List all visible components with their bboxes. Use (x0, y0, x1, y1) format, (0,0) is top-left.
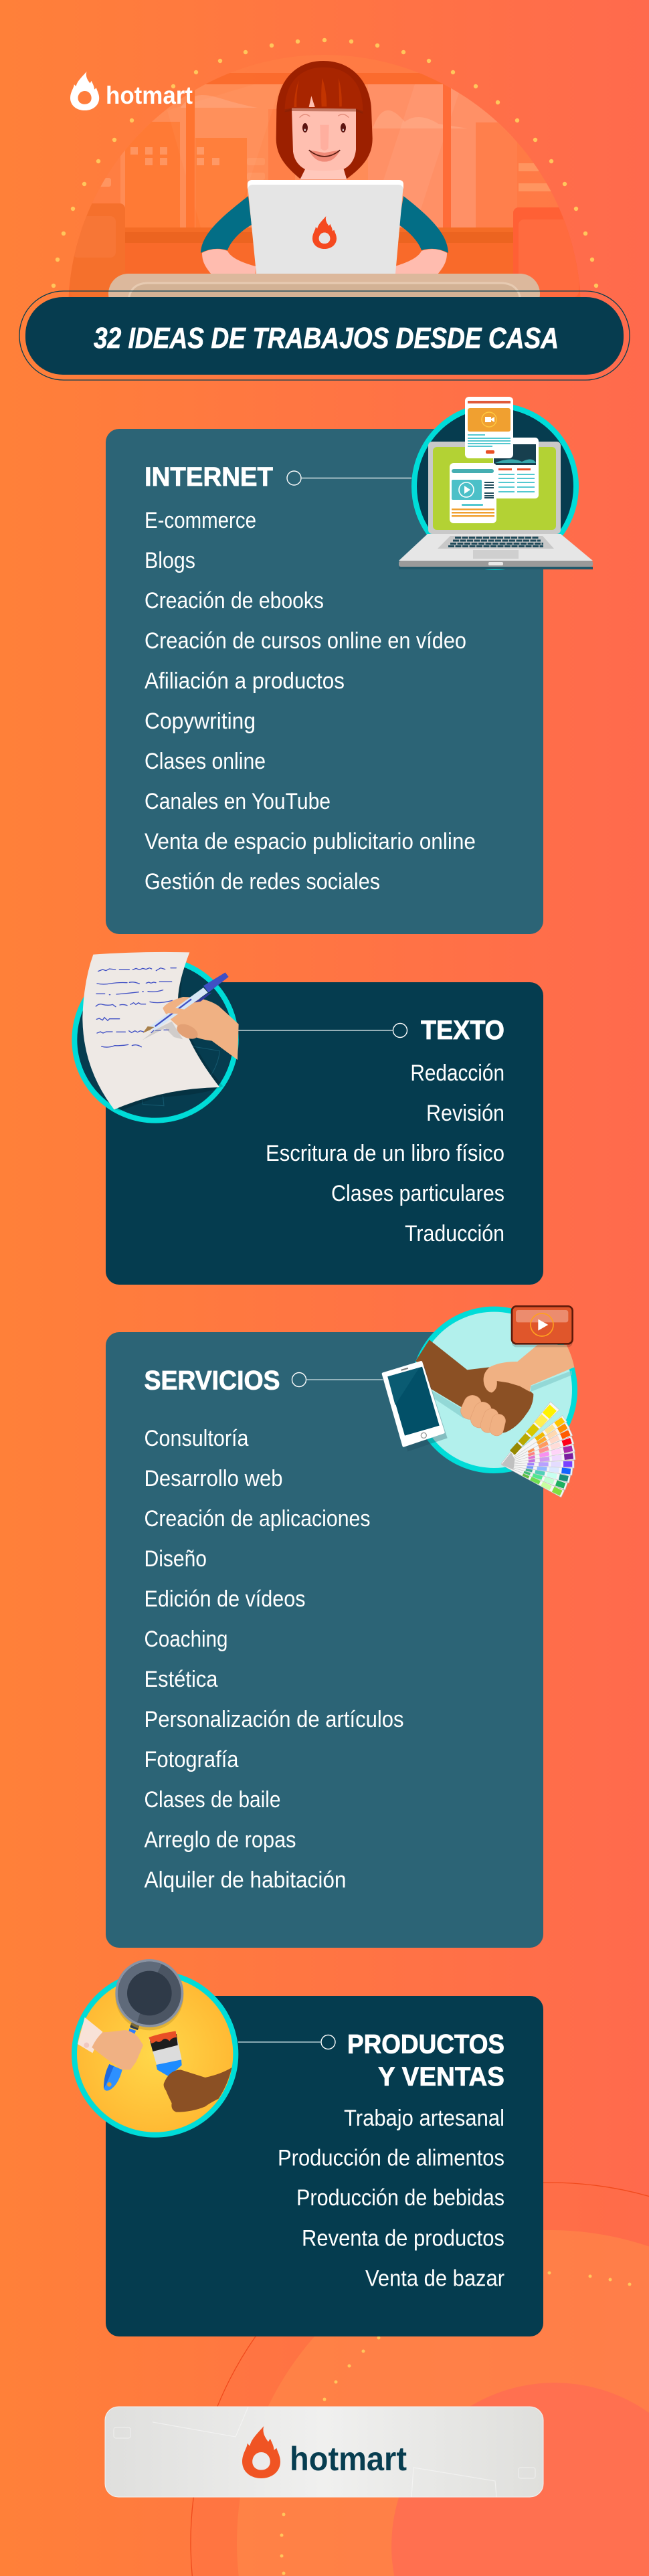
heading: texto: TEXTO (421, 1016, 504, 1045)
left hand and sleeve (78, 2017, 143, 2069)
list: internet: Creación de ebooks (145, 588, 324, 614)
bottom background domes (191, 2183, 649, 2576)
panel: internet (106, 429, 543, 934)
list: internet: E-commerce (145, 508, 256, 533)
list: texto: Redacción (410, 1061, 504, 1086)
illustration: laptop with web pages (399, 397, 593, 569)
title banner: 32 IDEAS DE TRABAJOS DESDE CASA (94, 322, 559, 355)
hotmart logo top: hotmart (106, 82, 193, 109)
heading: productos y ventas: Y VENTAS (378, 2062, 504, 2092)
connector: servicios (292, 1373, 383, 1386)
list: texto (266, 1061, 504, 1247)
arm shadows (428, 1370, 572, 1418)
hotmart logo top (70, 72, 193, 110)
heading: internet: INTERNET (145, 462, 273, 492)
pan (115, 1959, 183, 2030)
pen (143, 972, 229, 1033)
brown arm and hand (416, 1340, 533, 1433)
title banner (19, 291, 630, 380)
list: internet: Clases online (145, 749, 266, 774)
footer hotmart logo: hotmart (290, 2440, 407, 2478)
heading: servicios: SERVICIOS (145, 1366, 280, 1396)
connector: internet (287, 471, 411, 485)
paint brush (149, 2031, 182, 2078)
list: productos (278, 2106, 504, 2291)
dot halo (52, 38, 598, 288)
table (108, 274, 540, 314)
list: productos: Reventa de productos (302, 2225, 504, 2251)
light arm and hand (484, 1345, 574, 1392)
footer hotmart logo (105, 2407, 543, 2497)
list: productos: Venta de bazar (365, 2266, 504, 2291)
pan handle (104, 2022, 140, 2091)
list: internet: Creación de cursos online en vídeo (145, 628, 466, 654)
writing hand (163, 997, 239, 1060)
illustration: handshake, phone, video, color fan (383, 1306, 575, 1497)
left web card (450, 463, 496, 523)
list: internet: Canales en YouTube (145, 789, 331, 814)
connector: productos (238, 2035, 335, 2049)
list: servicios: Edición de vídeos (145, 1586, 305, 1612)
arms and hands (201, 196, 448, 274)
list: productos: Producción de alimentos (278, 2145, 504, 2171)
list: texto: Revisión (426, 1101, 504, 1126)
heading: productos y ventas (347, 2030, 504, 2092)
phone (383, 1362, 448, 1451)
list: servicios: Personalización de artículos (145, 1707, 404, 1732)
list: texto: Clases particulares (331, 1181, 504, 1206)
room dome (67, 54, 582, 301)
list: servicios: Desarrollo web (145, 1466, 282, 1491)
hero illustration: woman at laptop in front of window (52, 38, 598, 314)
right web card (493, 438, 539, 498)
connector: texto (238, 1024, 407, 1037)
heading: productos y ventas: PRODUCTOS (347, 2030, 504, 2059)
fingers (458, 1392, 507, 1437)
list: texto: Traducción (405, 1221, 504, 1247)
list: servicios: Consultoría (145, 1426, 249, 1451)
panel: texto (106, 982, 543, 1285)
list: internet: Venta de espacio publicitario online (145, 829, 476, 854)
video box (512, 1306, 573, 1347)
illustration: pan and paint brush (74, 1959, 236, 2135)
list: internet: Blogs (145, 548, 195, 573)
list: internet (145, 508, 476, 895)
list: servicios (145, 1426, 404, 1893)
list: productos: Producción de bebidas (296, 2185, 504, 2211)
panel: servicios (106, 1332, 543, 1948)
list: servicios: Estética (145, 1667, 218, 1692)
list: servicios: Diseño (145, 1546, 207, 1572)
list: productos: Trabajo artesanal (344, 2106, 504, 2131)
panel: productos y ventas (106, 1996, 543, 2336)
list: servicios: Clases de baile (145, 1787, 281, 1813)
list: internet: Gestión de redes sociales (145, 869, 380, 895)
color fan (497, 1402, 575, 1497)
list: servicios: Fotografía (145, 1747, 239, 1772)
list: internet: Copywriting (145, 709, 256, 734)
laptop back (248, 180, 403, 274)
list: servicios: Creación de aplicaciones (145, 1506, 371, 1532)
illustration: hand writing on paper (74, 952, 239, 1121)
woman head and hair (276, 61, 373, 179)
handwriting (96, 968, 176, 1047)
list: servicios: Arreglo de ropas (145, 1827, 296, 1853)
dark hand (164, 2067, 232, 2112)
list: servicios: Alquiler de habitación (145, 1867, 347, 1893)
list: internet: Afiliación a productos (145, 668, 345, 694)
top web card (465, 397, 513, 458)
list: servicios: Coaching (145, 1627, 227, 1652)
list: texto: Escritura de un libro físico (266, 1141, 504, 1166)
